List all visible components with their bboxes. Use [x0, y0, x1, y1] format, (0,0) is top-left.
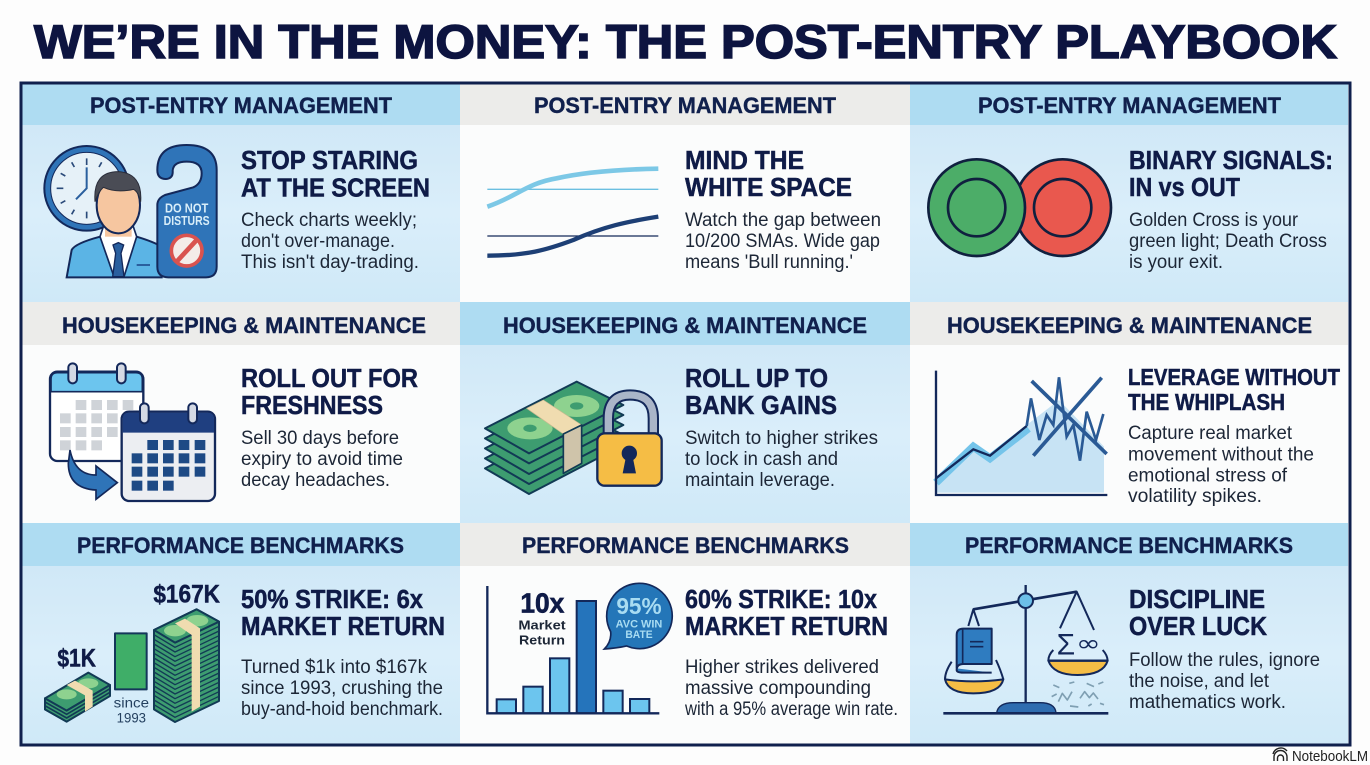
heading: post-entry management: POST-ENTRY MANAGEMENT [90, 93, 393, 118]
heading: post-entry management: POST-ENTRY MANAGEMENT [978, 93, 1282, 118]
card title: LEVERAGE WITHOUT [1128, 364, 1341, 390]
card description: decay headaches. [241, 470, 390, 491]
icon: small cash stack growing into tall stack [45, 581, 221, 725]
card description: 10/200 SMAs. Wide gap [685, 231, 880, 252]
heading: performance benchmarks: PERFORMANCE BENCHMARKS [522, 533, 849, 558]
card title: BANK GAINS [685, 392, 837, 420]
card description [1129, 650, 1320, 713]
icon: two calendars with arrow [50, 363, 215, 501]
card title: 60% STRIKE: 10x [685, 586, 877, 614]
icon: small cash stack growing into tall stack: $1K [57, 645, 97, 673]
heading: housekeeping and maintenance: HOUSEKEEPING & MAINTENANCE [947, 313, 1312, 338]
card description [241, 657, 443, 720]
card description [1128, 423, 1314, 507]
card description: Higher strikes delivered [685, 657, 879, 678]
card description: mathematics work. [1129, 692, 1286, 713]
bar chart: market return with win rate bubble: Return [519, 633, 565, 648]
card title: STOP STARING [241, 147, 418, 175]
icon: small cash stack growing into tall stack: since [114, 694, 149, 710]
card description: means 'Bull running.' [685, 252, 853, 273]
card title [685, 147, 852, 202]
card description: expiry to avoid time [241, 449, 403, 470]
panel: discipline over luck [910, 523, 1348, 744]
card description: is your exit. [1129, 252, 1223, 273]
card description [1129, 210, 1327, 273]
bar chart: market return with win rate bubble: 10x [520, 588, 565, 619]
card description: buy-and-hoid benchmark. [241, 699, 443, 720]
heading: housekeeping and maintenance: HOUSEKEEPING & MAINTENANCE [503, 313, 867, 338]
icon: balance scale with book and math symbols: Σ [1057, 629, 1075, 662]
icon: clock, businessman and do not disturb sign [43, 145, 217, 277]
card title [241, 365, 418, 420]
card title: IN vs OUT [1129, 174, 1240, 202]
card description: since 1993, crushing the [241, 678, 443, 699]
card description [684, 657, 898, 720]
card description: Sell 30 days before [241, 428, 399, 449]
bar chart: market return with win rate bubble: 95% [616, 593, 662, 619]
panel: roll up to bank gains [460, 302, 910, 523]
icon: balance scale with book and math symbols: ∞ [1076, 631, 1101, 657]
card description [241, 428, 403, 491]
bar chart: market return with win rate bubble: AVC WIN [616, 618, 662, 630]
heading: performance benchmarks: PERFORMANCE BENCHMARKS [77, 533, 404, 558]
card description: Follow the rules, ignore [1129, 650, 1320, 671]
card title: ROLL OUT FOR [241, 365, 418, 393]
panel: 60% strike [460, 523, 910, 744]
card title [241, 586, 445, 641]
card title: 50% STRIKE: 6x [241, 586, 423, 614]
bar chart: market return with win rate bubble: Market [518, 617, 566, 632]
card title [1129, 147, 1333, 202]
card title [1129, 586, 1268, 641]
title: WE’RE IN THE MONEY: THE POST-ENTRY PLAYBOOK [34, 15, 1337, 68]
card description: movement without the [1128, 444, 1314, 466]
card title [1128, 364, 1341, 415]
panel: leverage without the whiplash [910, 302, 1348, 523]
card description: with a 95% average win rate. [684, 699, 898, 720]
bar chart: market return with win rate bubble [487, 583, 672, 713]
card title: WHITE SPACE [685, 174, 852, 202]
card title [685, 586, 888, 641]
icon: clock, businessman and do not disturb sign: DO NOT [165, 201, 208, 216]
card description [241, 210, 419, 273]
card description: volatility spikes. [1128, 486, 1262, 507]
heading: performance benchmarks: PERFORMANCE BENCHMARKS [965, 533, 1293, 558]
card description: Watch the gap between [685, 210, 881, 231]
icon: clock, businessman and do not disturb sign: DISTURS [164, 213, 210, 228]
icon: cash stack with padlock [485, 382, 662, 494]
heading: housekeeping and maintenance: HOUSEKEEPING & MAINTENANCE [62, 313, 426, 338]
card title [685, 365, 837, 420]
card description: massive compounding [685, 678, 871, 699]
card description: don't over-manage. [241, 231, 395, 252]
card description [685, 210, 881, 273]
icon: balance scale with book and math symbols [943, 585, 1108, 713]
heading: post-entry management: POST-ENTRY MANAGEMENT [534, 93, 837, 118]
card title: ROLL UP TO [685, 365, 828, 393]
card description: Capture real market [1128, 423, 1293, 444]
icon: small cash stack growing into tall stack: $167K [153, 581, 221, 609]
card description: Golden Cross is your [1129, 210, 1299, 231]
card description: Check charts weekly; [241, 210, 417, 231]
card description: to lock in cash and [685, 449, 838, 470]
card title: THE WHIPLASH [1128, 389, 1285, 415]
card title: MARKET RETURN [685, 613, 888, 641]
card title: OVER LUCK [1129, 613, 1268, 641]
card title: MIND THE [685, 147, 804, 175]
icon: moving average lines with gap [487, 169, 658, 256]
card description: green light; Death Cross [1129, 231, 1327, 252]
panel: roll out for freshness [22, 302, 460, 523]
icon: green and red signal circles [928, 159, 1111, 256]
panel: mind the white space [460, 84, 910, 302]
card description: the noise, and let [1129, 671, 1270, 692]
icon: line chart with crossed out volatility [936, 371, 1107, 495]
card title [241, 147, 430, 202]
card title: AT THE SCREEN [241, 174, 430, 202]
card description [685, 428, 878, 491]
card description: emotional stress of [1128, 466, 1288, 486]
icon: small cash stack growing into tall stack: 1993 [117, 709, 146, 725]
bar chart: market return with win rate bubble: BATE [625, 629, 653, 641]
card description: This isn't day-trading. [241, 252, 419, 273]
panel: 50% strike [22, 523, 460, 744]
card description: maintain leverage. [685, 470, 835, 491]
card title: DISCIPLINE [1129, 586, 1265, 614]
card description: Switch to higher strikes [685, 428, 878, 449]
card description: Turned $1k into $167k [241, 657, 427, 678]
card title: MARKET RETURN [241, 613, 445, 641]
card title: BINARY SIGNALS: [1129, 147, 1333, 175]
panel: binary signals [910, 84, 1348, 302]
card title: FRESHNESS [241, 392, 383, 420]
panel: stop staring at the screen [22, 84, 460, 302]
